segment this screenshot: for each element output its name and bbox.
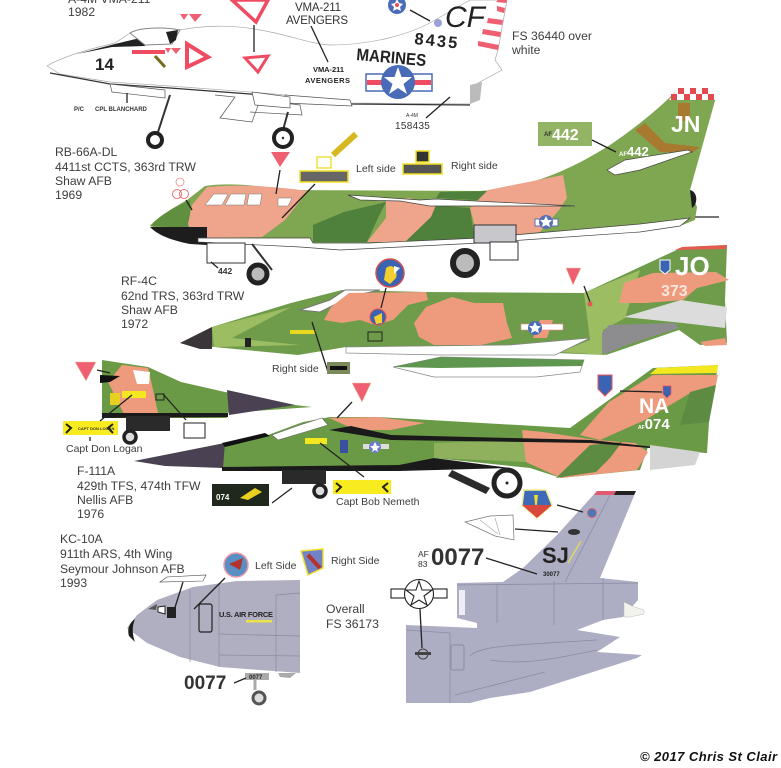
KC-10 nose callouts: 0077 bbox=[184, 673, 226, 694]
aircraft: F-111A nose detail bbox=[100, 360, 312, 443]
RB-66 callouts: AF bbox=[544, 132, 552, 138]
F-111 section callouts bbox=[63, 362, 205, 455]
RF-4C canopy bbox=[300, 290, 380, 312]
RB-66 tail brown band bbox=[635, 123, 700, 153]
F-111 section camouflage bbox=[102, 360, 312, 418]
caption: RF-4C: Shaw AFB bbox=[121, 303, 178, 317]
RB-66 insignia bbox=[535, 215, 558, 229]
caption: RB-66A-DL: 4411st CCTS, 363rd TRW bbox=[55, 160, 196, 174]
F-111 section callouts: Capt Don Logan bbox=[66, 443, 143, 455]
A-4M wheels bbox=[148, 129, 292, 147]
F-111 gear door bbox=[448, 470, 490, 494]
A-4M labels bbox=[74, 2, 450, 132]
F-111 tail serial: AF074 bbox=[638, 416, 670, 433]
RF-4C tail badge bbox=[660, 260, 670, 274]
RF-4C rear light green bbox=[560, 270, 640, 355]
KC-10 nose callouts bbox=[160, 549, 380, 694]
F-111 callouts: 074 bbox=[216, 493, 230, 502]
KC-10 cockpit windows bbox=[148, 604, 176, 618]
A-4M labels: VMA-211 bbox=[313, 65, 344, 74]
A-4M pitot decal bbox=[155, 56, 165, 67]
caption: F-111A: Nellis AFB bbox=[77, 493, 133, 507]
F-111 section lower panel bbox=[126, 416, 170, 431]
caption: A-4M paint bbox=[511, 29, 592, 57]
aircraft: RF-4C Phantom bbox=[180, 245, 729, 377]
F-111 fuselage base bbox=[140, 365, 718, 478]
A-4M headrest bbox=[166, 30, 178, 44]
F-111 grey tail end bbox=[650, 445, 700, 470]
caption: A-4M paint: white bbox=[511, 43, 541, 57]
F-111 fuselage badge bbox=[340, 440, 348, 453]
KC-10 panel lines bbox=[190, 583, 300, 672]
F-111 section wheel bbox=[124, 431, 136, 443]
A-4M tail roundel callout bbox=[388, 0, 442, 27]
RF-4C dark grey panel bbox=[602, 323, 679, 355]
A-4M labels: AVENGERS bbox=[286, 15, 348, 27]
F-111 yellow fin tip bbox=[650, 365, 718, 374]
caption: RF-4C bbox=[121, 274, 245, 331]
aircraft: RB-66A-DL bbox=[150, 88, 719, 283]
caption: KC-10A bbox=[60, 532, 185, 590]
KC-10 tail door bbox=[451, 645, 464, 670]
RB-66 windows bbox=[205, 194, 292, 206]
KC-10 tail callouts bbox=[391, 490, 583, 648]
A-4M rear fuselage grey bbox=[470, 82, 482, 104]
KC-10 stores bbox=[278, 673, 296, 678]
caption: RB-66A-DL bbox=[55, 145, 196, 202]
RF-4C callouts bbox=[272, 259, 592, 375]
F-111 callouts: Capt Bob Nemeth bbox=[336, 496, 420, 508]
RB-66 checker fin tip bbox=[669, 88, 718, 100]
A-4M labels: A-4M bbox=[406, 113, 418, 119]
F-111 section callouts: CAPT DON LOGAN bbox=[78, 426, 115, 431]
RB-66 wing bbox=[348, 195, 575, 206]
caption: KC-10A: 1993 bbox=[60, 576, 87, 590]
RB-66 landing gear bbox=[207, 242, 518, 270]
RB-66 nose green bbox=[150, 200, 190, 228]
A-4M labels: P/C bbox=[74, 107, 85, 113]
KC-10 exhaust bbox=[624, 602, 644, 617]
F-111 yellow mark bbox=[305, 438, 327, 444]
KC-10 fin dark mark bbox=[568, 529, 580, 535]
RB-66 forward salmon bbox=[188, 186, 308, 238]
KC-10 tail callouts: 0077 bbox=[431, 544, 484, 571]
KC-10 fin tip stripes bbox=[594, 491, 636, 495]
F-111 belly line bbox=[222, 458, 510, 471]
RF-4C yellow mark bbox=[290, 330, 316, 334]
caption: KC-10A: KC-10A bbox=[60, 532, 104, 546]
RB-66 exhaust bbox=[690, 190, 696, 208]
F-111 section belly bbox=[102, 413, 228, 418]
KC-10 fuselage serial small bbox=[245, 673, 269, 681]
RF-4C fuselage emblem bbox=[370, 309, 386, 325]
aircraft: F-111A Aardvark bbox=[134, 365, 718, 497]
RB-66 rudder patch bbox=[678, 103, 690, 121]
KC-10 fin yellow line bbox=[568, 541, 581, 563]
RB-66 salmon patches bbox=[367, 175, 567, 242]
caption: RB-66A-DL: 1969 bbox=[55, 188, 82, 202]
F-111 black strake bbox=[222, 433, 270, 447]
caption: F-111A: 1976 bbox=[77, 507, 104, 521]
RB-66 callouts: Right side bbox=[451, 160, 498, 172]
KC-10 fin badge bbox=[588, 508, 596, 518]
caption: KC-10A: 911th ARS, 4th Wing bbox=[60, 547, 172, 561]
F-111 black wing line bbox=[329, 426, 709, 453]
RF-4C light nose bbox=[212, 307, 300, 347]
RB-66 callouts bbox=[172, 122, 616, 276]
A-4M triangle markings bbox=[165, 14, 202, 54]
RF-4C underwing white bbox=[346, 338, 590, 355]
F-111 weapons bay bbox=[282, 470, 326, 484]
KC-10 small insignia bbox=[415, 649, 431, 659]
RB-66 base camouflage bbox=[150, 90, 718, 248]
F-111 canopy bbox=[272, 418, 328, 440]
caption: F-111A bbox=[77, 464, 201, 521]
A-4M serial tail: 8435 bbox=[414, 30, 458, 52]
RF-4C tail tip bbox=[675, 245, 727, 250]
F-111 callouts bbox=[212, 375, 662, 508]
KC-10 nose callouts: Right Side bbox=[331, 555, 380, 567]
RF-4C serial: 373 bbox=[661, 283, 688, 300]
A-4M nose number: 14 bbox=[95, 55, 114, 74]
caption: A-4M paint: FS 36440 over bbox=[512, 29, 592, 43]
KC-10 fuselage serial small: 0077 bbox=[249, 675, 263, 681]
aircraft: KC-10A tail bbox=[406, 491, 644, 703]
F-111 section dark nose bbox=[227, 390, 295, 415]
RF-4C nose cone bbox=[180, 327, 212, 349]
RB-66 intake panel bbox=[474, 225, 516, 243]
KC-10 radome bbox=[128, 619, 135, 642]
A-4M emblem arrow bbox=[253, 25, 255, 52]
A-4M anti-glare panel bbox=[77, 38, 145, 54]
A-4M labels: VMA-211 bbox=[295, 2, 341, 14]
A-4M labels: 158435 bbox=[395, 121, 430, 132]
A-4M emblem detail bbox=[232, 0, 268, 22]
RF-4C insignia bbox=[521, 321, 563, 335]
A-4M canopy bbox=[130, 28, 180, 45]
caption: F-111A: F-111A bbox=[77, 464, 116, 478]
caption: RF-4C: RF-4C bbox=[121, 274, 157, 288]
RF-4C fuel tank bbox=[393, 357, 584, 377]
F-111 roundel bbox=[363, 441, 389, 453]
KC-10 fin serial: 30077 bbox=[543, 572, 560, 578]
KC-10 wheel bbox=[253, 673, 265, 704]
KC-10 tail callouts: 83 bbox=[418, 559, 428, 569]
RF-4C base camouflage bbox=[180, 245, 727, 355]
KC-10 engine panel lines bbox=[406, 495, 638, 703]
F-111 section salmon bbox=[108, 365, 158, 416]
KC-10 nose fuselage bbox=[127, 580, 300, 673]
caption: RF-4C: 62nd TRS, 363rd TRW bbox=[121, 289, 245, 303]
aircraft: KC-10A nose bbox=[127, 580, 300, 704]
caption: RF-4C: 1972 bbox=[121, 317, 148, 331]
RF-4C callouts: Right side bbox=[272, 363, 319, 375]
KC-10 tail fuselage bbox=[406, 491, 642, 703]
caption: KC-10 paint: FS 36173 bbox=[326, 617, 379, 631]
F-111 section canopy bbox=[133, 370, 150, 384]
RB-66 callouts: Left side bbox=[356, 163, 396, 175]
F-111 section badge bbox=[110, 393, 120, 405]
A-4M fuselage bbox=[47, 0, 507, 104]
caption: A-4M bbox=[68, 0, 151, 19]
F-111 section black strake bbox=[100, 375, 120, 383]
A-4M red stripe bbox=[132, 50, 165, 54]
RB-66 callouts: 442 bbox=[218, 266, 232, 276]
RB-66 white belly bbox=[198, 218, 690, 250]
caption: RB-66A-DL: RB-66A-DL bbox=[55, 145, 118, 159]
KC-10 tail callouts: AF bbox=[418, 549, 429, 559]
F-111 tail code: NA bbox=[639, 395, 669, 418]
RF-4C nose intake mark bbox=[245, 338, 251, 347]
RB-66 tail gun bbox=[695, 216, 719, 218]
KC-10 fin code: SJ bbox=[542, 543, 569, 568]
A-4M labels: CPL BLANCHARD bbox=[95, 107, 148, 113]
caption: A-4M: 1982 bbox=[68, 5, 95, 19]
caption: KC-10 paint bbox=[326, 602, 379, 631]
caption: RB-66A-DL: Shaw AFB bbox=[55, 174, 112, 188]
KC-10 nose callouts: Left Side bbox=[255, 560, 297, 572]
KC-10 US AIR FORCE title: U.S. AIR FORCE bbox=[219, 610, 273, 619]
A-4M labels: AVENGERS bbox=[305, 76, 350, 85]
F-111 nose wheel bbox=[314, 485, 326, 497]
F-111 section yellow mark bbox=[122, 391, 146, 398]
RB-66 wheels bbox=[249, 251, 477, 283]
RB-66 black nose bbox=[150, 227, 207, 245]
A-4M red triangle outline bbox=[187, 44, 208, 67]
caption: F-111A: 429th TFS, 474th TFW bbox=[77, 479, 201, 493]
F-111 dark nose bbox=[134, 443, 225, 468]
KC-10 engine intake highlight bbox=[459, 590, 465, 615]
caption: KC-10 paint: Overall bbox=[326, 602, 365, 616]
F-111 dark green patches bbox=[556, 385, 716, 478]
A-4M pylons and stores bbox=[110, 84, 352, 122]
aircraft: A-4M Skyhawk bbox=[47, 0, 507, 147]
A-4M underside line bbox=[50, 73, 470, 105]
A-4M rudder stripes bbox=[478, 0, 507, 50]
RF-4C tail code: JO bbox=[675, 251, 710, 281]
A-4M landing gear bbox=[158, 95, 288, 132]
RB-66 tail serial: AF442 bbox=[619, 144, 649, 159]
RB-66 dark green blobs bbox=[313, 191, 536, 242]
A-4M squadron emblem bbox=[245, 56, 268, 72]
RF-4C grey tail section bbox=[624, 300, 727, 328]
KC-10 crew door bbox=[199, 604, 212, 632]
F-111 main wheel bbox=[494, 470, 520, 496]
RB-66 tail code: JN bbox=[671, 111, 700, 137]
RB-66 stabilizer bbox=[607, 150, 692, 175]
caption: KC-10A: Seymour Johnson AFB bbox=[60, 562, 185, 576]
F-111 light green band bbox=[434, 440, 526, 462]
A-4M national insignia bbox=[366, 65, 432, 99]
RF-4C salmon patches bbox=[324, 272, 729, 346]
copyright credit: © 2017 Chris St Clair bbox=[640, 749, 778, 764]
F-111 fin badge bbox=[663, 386, 671, 398]
RF-4C rectangle mark bbox=[368, 332, 382, 341]
F-111 salmon patches bbox=[329, 375, 718, 478]
KC-10 yellow stripe bbox=[246, 620, 272, 622]
A-4M tail code: CF bbox=[445, 1, 487, 34]
A-4M MARINES: MARINES bbox=[356, 45, 427, 70]
RB-66 callouts: 442 bbox=[552, 127, 579, 144]
